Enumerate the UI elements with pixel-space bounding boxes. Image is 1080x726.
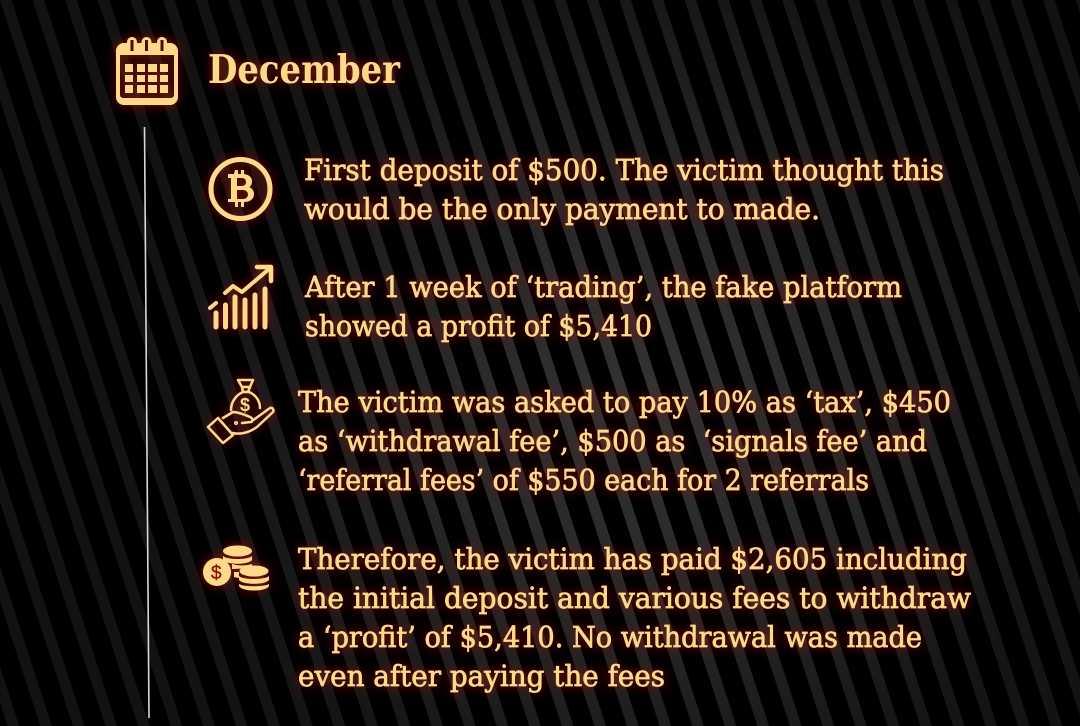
text block: fees: ‘referral fees’ of $550 each for 2 referrals — [298, 463, 869, 497]
icon: money bag in hand: $ — [240, 395, 250, 415]
text block: total paid: a ‘profit’ of $5,410. No withdrawal was made — [298, 620, 922, 654]
timeline line — [144, 127, 149, 718]
text block: profit: After 1 week of ‘trading’, the fake platform — [304, 270, 902, 304]
icon: growth chart — [210, 267, 271, 327]
text block: total paid: even after paying the fees — [298, 659, 665, 693]
icon: coins: $ — [211, 563, 222, 584]
text block: first deposit: First deposit of $500. The victim thought this — [304, 153, 944, 187]
text block: first deposit — [304, 153, 944, 226]
text block: profit: showed a profit of $5,410 — [305, 309, 652, 343]
title: December — [208, 47, 400, 93]
text block: total paid — [298, 542, 971, 693]
text block: total paid: Therefore, the victim has paid $2,605 including — [298, 542, 967, 576]
text block: profit — [304, 270, 902, 343]
text block: first deposit: would be the only payment to made. — [304, 192, 820, 226]
text block: total paid: the initial deposit and various fees to withdraw — [298, 581, 971, 615]
icon: coins — [203, 546, 269, 590]
text block: fees — [298, 385, 951, 497]
text block: fees: as ‘withdrawal fee’, $500 as ‘signals fee’ and — [298, 424, 927, 458]
icon: money bag in hand — [208, 380, 273, 443]
icon: calendar — [116, 37, 178, 105]
text block: fees: The victim was asked to pay 10% as ‘tax’, $450 — [298, 385, 951, 419]
icon: bitcoin — [211, 160, 270, 218]
